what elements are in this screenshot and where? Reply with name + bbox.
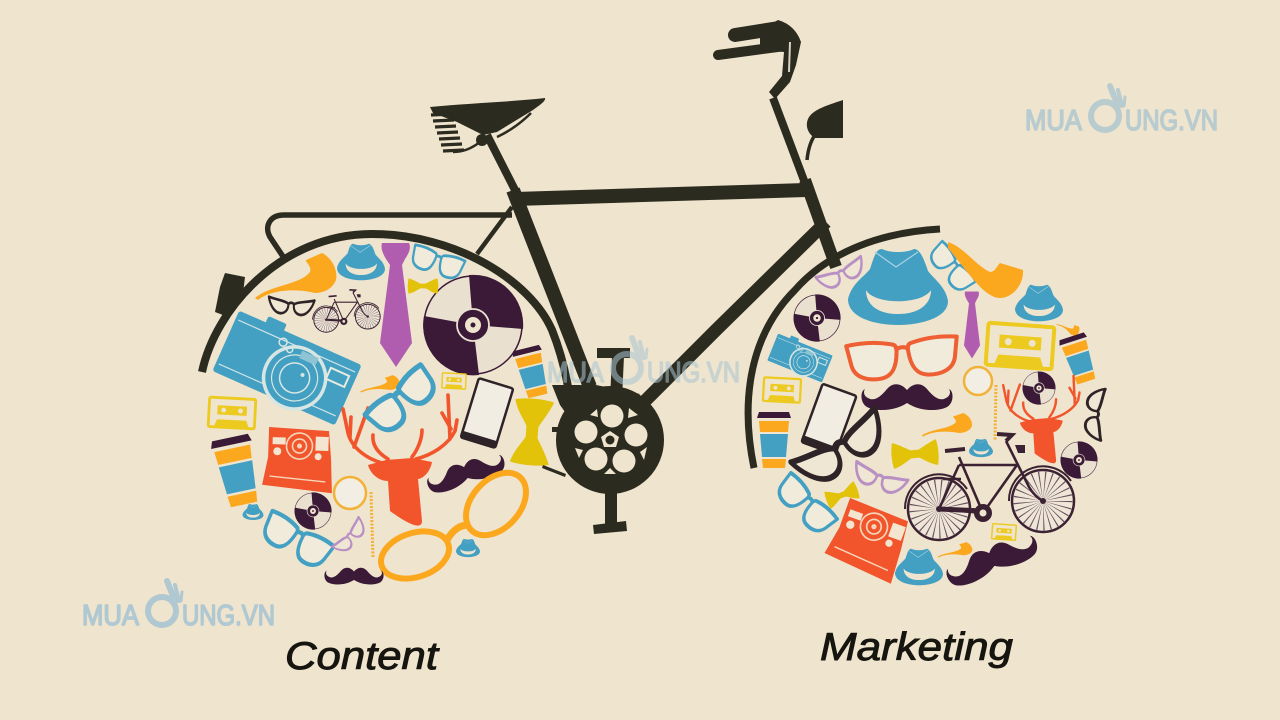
icon: tiny tape [442, 373, 466, 389]
icon: mustache [424, 450, 508, 496]
icon: tiny blue hat [456, 539, 480, 557]
watermark: top right: UNG.VN [1125, 105, 1218, 137]
watermark: bottom left: UNG.VN [182, 600, 275, 632]
icon: big camera [211, 304, 364, 429]
icon: blue glasses top [926, 241, 977, 295]
icon: blue glasses top [409, 244, 466, 281]
icon: coffee cup [210, 433, 264, 509]
front fender [748, 229, 940, 468]
icon: small blue hat lower left [242, 504, 264, 520]
icon: bottom hat [895, 549, 943, 585]
icon: saddle [430, 98, 545, 152]
icon: small pipe [360, 375, 400, 393]
icon: small hat [1015, 285, 1063, 321]
watermark: center: UNG.VN [647, 357, 740, 389]
watermark: top right [1025, 86, 1218, 137]
icon: monocle [964, 367, 996, 440]
icon: phone [461, 378, 513, 448]
icon: blue glasses bottom [258, 510, 335, 571]
icon: deer [1003, 376, 1080, 463]
icon: handlebar [718, 20, 801, 99]
icon: mustache [861, 384, 953, 410]
chainring and pedals [542, 348, 664, 534]
fork [805, 180, 836, 267]
icon: vinyl [794, 294, 841, 342]
right wheel icons [757, 241, 1105, 591]
icon: headlamp [807, 100, 843, 160]
icon: side glasses [1084, 387, 1105, 441]
icon: small bow [823, 481, 861, 509]
icon: small corner pipe [1056, 314, 1082, 339]
icon: purple glasses [332, 517, 369, 556]
top tube [515, 190, 806, 199]
icon: mini bicycle [313, 290, 380, 332]
left wheel icons [208, 243, 554, 587]
seat stay [477, 207, 512, 254]
icon: cup top right [1058, 332, 1100, 386]
icon: monocle [334, 477, 373, 558]
icon: purple glasses top [815, 256, 868, 292]
icon: purple tie [380, 243, 412, 367]
icon: vinyl right [1061, 441, 1098, 479]
icon: orange pipe [255, 253, 336, 300]
watermark: bottom left [82, 581, 275, 632]
rear fender [202, 234, 568, 387]
icon: top pedal [597, 348, 630, 400]
watermark: center: MUA [547, 357, 605, 389]
icon: small pipe [922, 413, 972, 436]
icon: deer head [343, 395, 457, 526]
icon: phone [801, 384, 857, 454]
watermark: bottom left: MUA [82, 600, 140, 632]
icon: small vinyl [295, 492, 332, 530]
bicycle frame [202, 98, 940, 468]
icon: bottom mustache [324, 568, 384, 584]
icon: pipe bottom [937, 542, 972, 558]
icon: yellow tape [208, 397, 256, 429]
icon: large orange glasses [375, 461, 538, 587]
icon: blue glasses bottom [773, 472, 838, 537]
icon: tiny hat [969, 439, 993, 457]
icon: small tie [964, 292, 980, 358]
icon: small vinyl [1023, 371, 1056, 405]
icon: tiny tape [992, 524, 1016, 540]
icon: chainring [556, 386, 664, 494]
icon: bottom pedal [593, 485, 627, 534]
seat tube [513, 190, 590, 387]
head tube [773, 98, 805, 183]
icon: orange pipe [948, 242, 1023, 298]
icon: bottom bracket lug [542, 385, 640, 477]
icon: red glasses [846, 335, 960, 382]
icon: small yellow bow [408, 278, 438, 294]
icon: large bow [510, 397, 554, 467]
icon: polaroid [822, 496, 914, 584]
icon: bottom mustache [943, 530, 1041, 591]
icon: large vinyl record [423, 275, 523, 375]
icon: large hat [848, 249, 948, 325]
down tube [638, 222, 826, 408]
icon: small camera [767, 331, 834, 384]
rear rack [268, 215, 512, 258]
icon: large blue glasses [364, 364, 441, 437]
icon: large bicycle [905, 434, 1074, 540]
icon: rear reflector [215, 273, 245, 315]
icon: small hat [337, 244, 385, 280]
icon: big tape [986, 323, 1054, 369]
icon: small tape [763, 377, 801, 403]
icon: dark cat glasses [791, 408, 894, 492]
heading: Content: Content [285, 635, 440, 678]
icon: yellow bow [890, 439, 940, 469]
icon: polaroid [262, 427, 334, 493]
icon: cup [757, 412, 791, 468]
seat post [487, 135, 515, 190]
heading: Marketing: Marketing [820, 626, 1013, 669]
icon: cup top [512, 344, 552, 400]
watermark: top right: MUA [1025, 105, 1083, 137]
watermark: center [547, 338, 740, 389]
icon: dark cat glasses [267, 297, 315, 316]
icon: purple glasses mid [850, 461, 908, 497]
